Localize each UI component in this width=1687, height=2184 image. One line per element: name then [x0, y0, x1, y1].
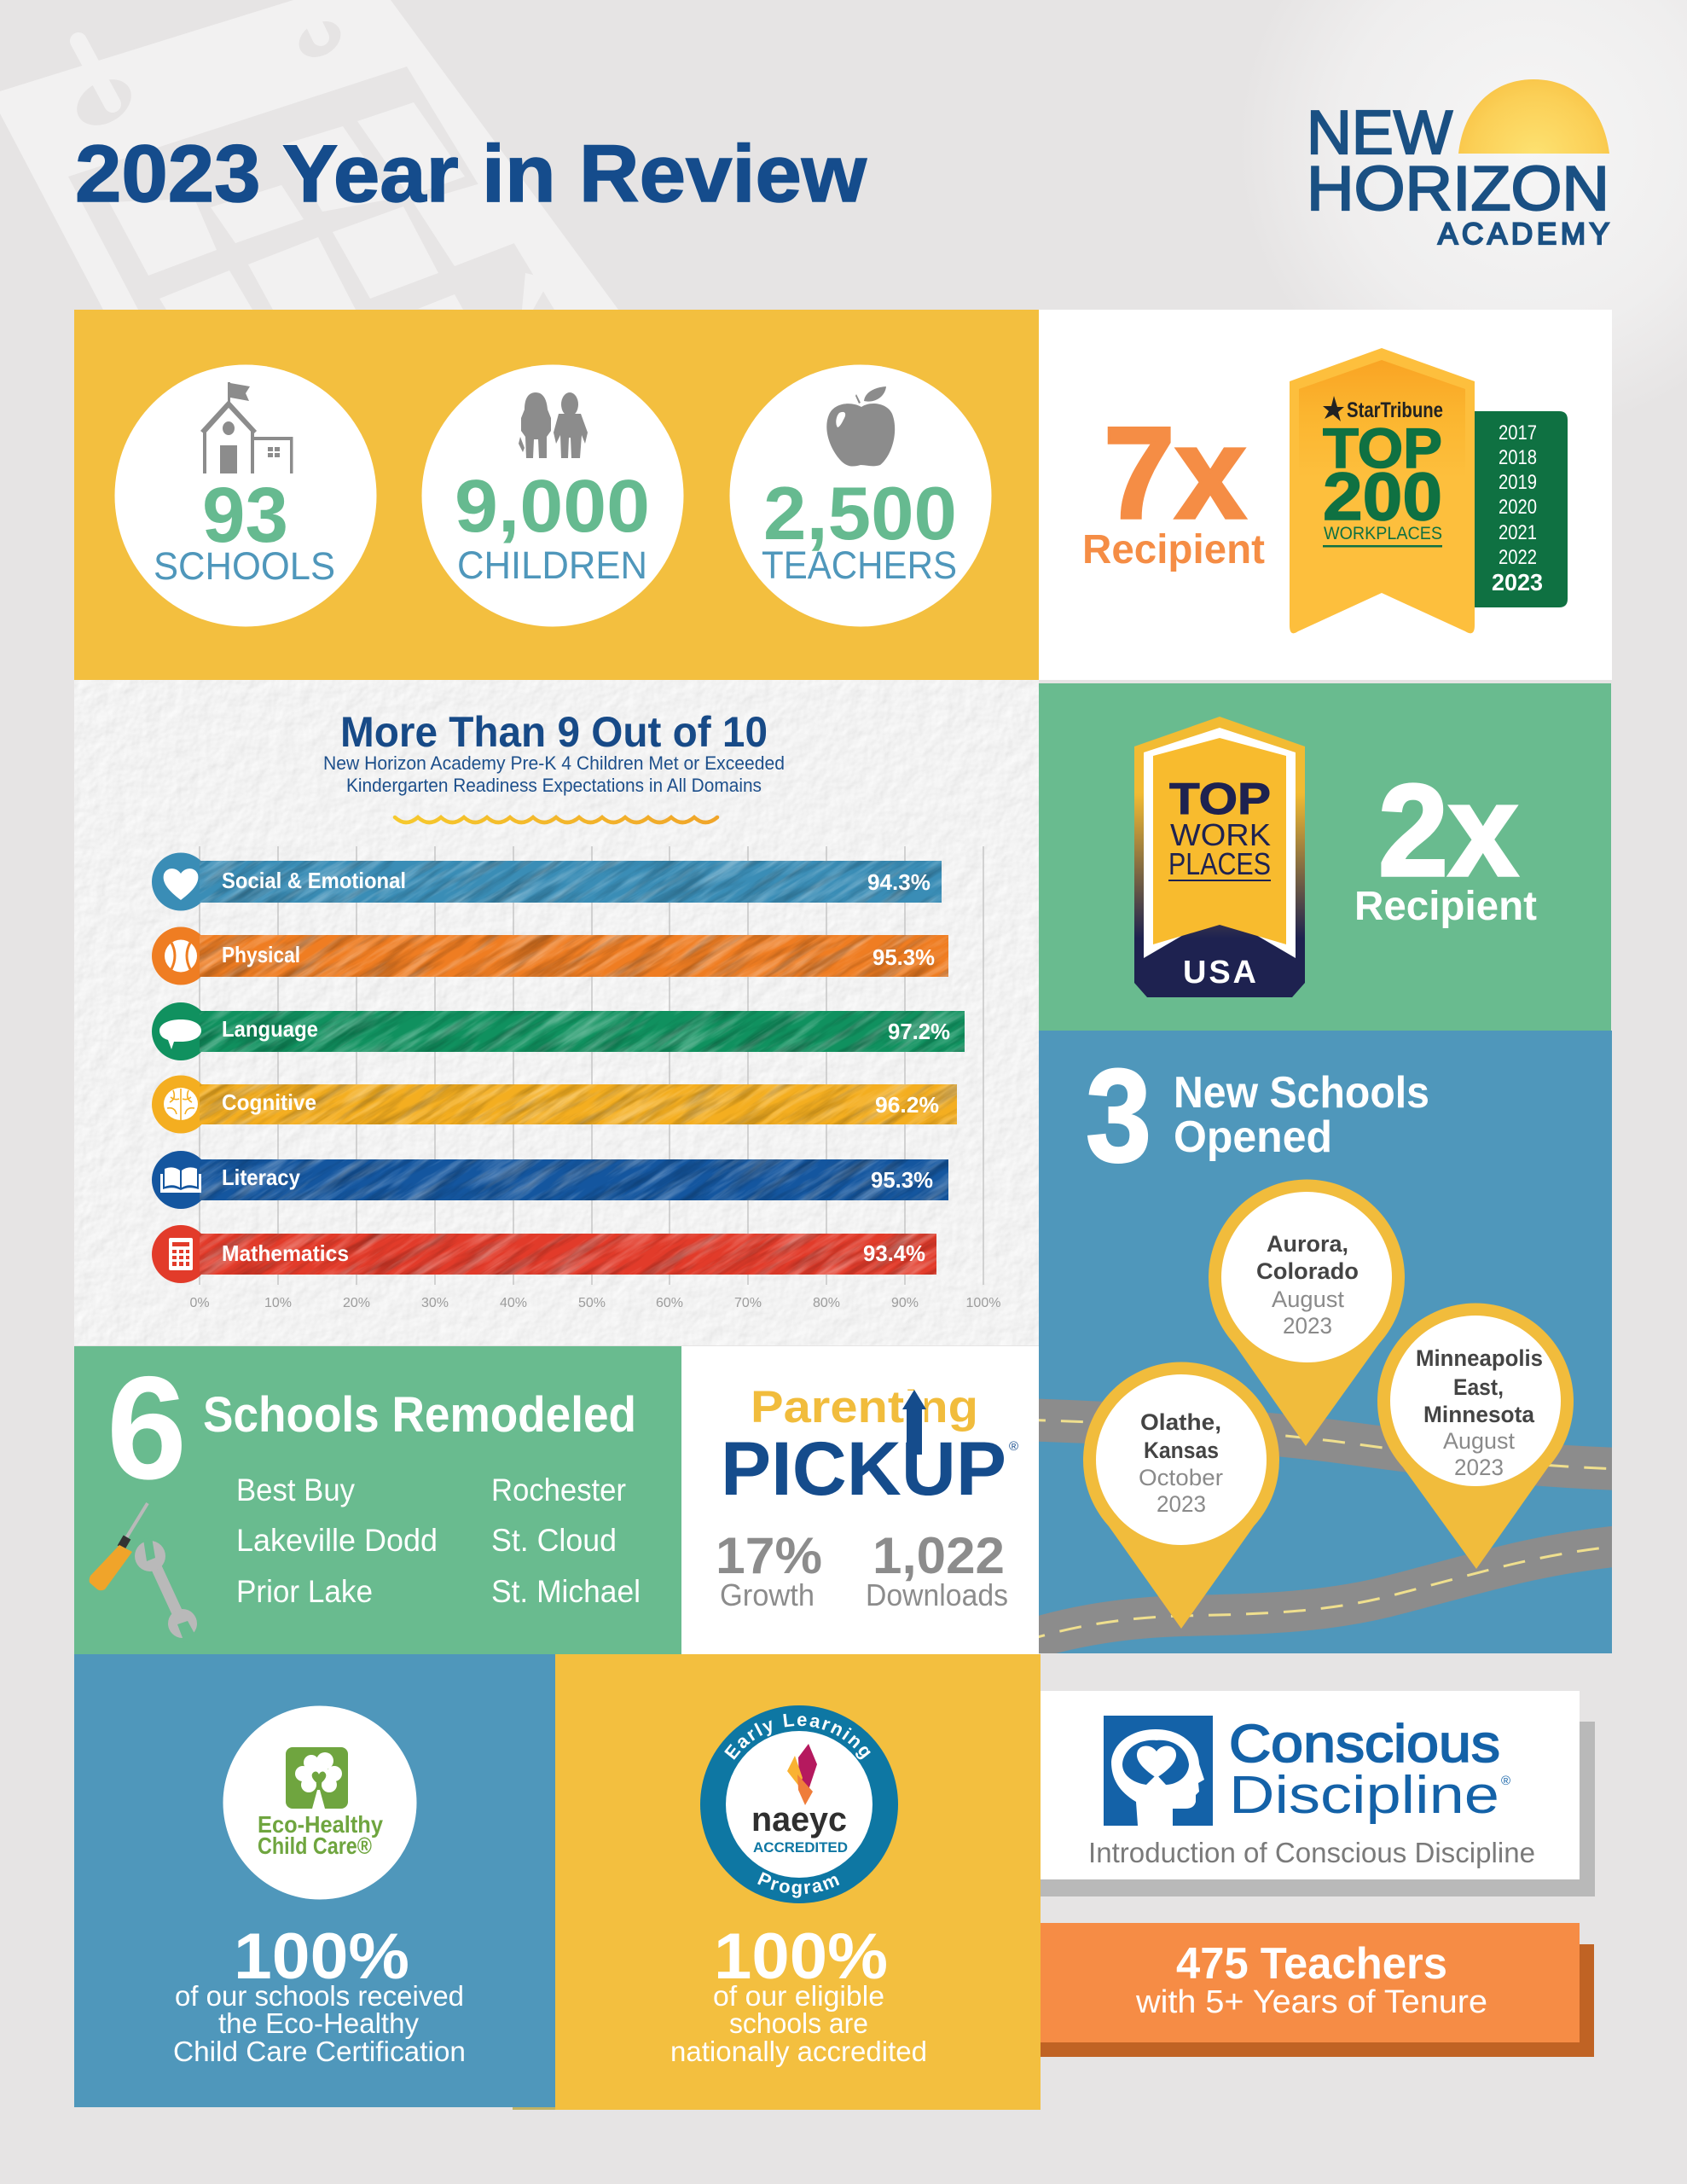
icon: calculator: [169, 1238, 193, 1270]
logo: NAEYC: Early Learning: [724, 1713, 871, 1760]
chart heading: More Than 9 Out of 10: [340, 708, 768, 756]
pin: Minneapolis East, Minnesota: Minnesota: [1423, 1402, 1535, 1427]
chart subheading: [323, 752, 785, 796]
description: nationally accredited: [670, 2036, 927, 2067]
ribbon badge: 200: [1323, 458, 1442, 534]
icon: tree: [286, 1747, 348, 1809]
panel: Star Tribune award: [1039, 310, 1612, 680]
bar: language: Language: [222, 1016, 318, 1042]
school list: [236, 1472, 641, 1609]
stat: 93 schools: [114, 365, 377, 626]
bar: mathematics: 93.4%: [863, 1240, 925, 1266]
icon: star: [1323, 396, 1344, 421]
logo wordmark: [1307, 99, 1609, 251]
bar: social and emotional: [152, 853, 942, 911]
years tab: 2021: [1499, 521, 1537, 544]
bar: cognitive: [152, 1075, 957, 1133]
school list: Lakeville Dodd: [236, 1523, 438, 1558]
bar: cognitive: 96.2%: [875, 1092, 939, 1118]
stat: downloads: 1,022: [872, 1527, 1005, 1584]
logo: New Horizon Academy: [1307, 79, 1609, 251]
heading: [1174, 1068, 1429, 1162]
chart axis labels: 100%: [966, 1296, 1000, 1310]
tenure number: 475 Teachers: [1176, 1939, 1447, 1989]
description: of our eligible: [713, 1980, 884, 2012]
chart axis labels: 50%: [578, 1296, 606, 1310]
ribbon badge: StarTribune: [1347, 398, 1443, 422]
number: 9,000: [455, 465, 650, 548]
title: 2023 Year in Review: [75, 129, 867, 219]
logo wordmark: NEW: [1307, 99, 1452, 167]
roads: [1023, 1420, 1620, 1641]
icon: apple: [826, 386, 895, 467]
school list: Prior Lake: [236, 1574, 373, 1609]
bar: language: 97.2%: [888, 1019, 950, 1044]
logo: Eco-Healthy Child Care: Child Care®: [258, 1833, 372, 1859]
ribbon badge: [1290, 348, 1475, 633]
bar: social and emotional: Social & Emotional: [222, 868, 406, 893]
chart subheading: New Horizon Academy Pre-K 4 Children Met or Exceeded: [323, 752, 785, 774]
chart axis labels: 90%: [891, 1296, 919, 1310]
panel: new schools opened: [1023, 1031, 1620, 1653]
chart axis labels: [189, 1296, 1000, 1310]
wordmark: Parenting: Parenting: [751, 1382, 978, 1432]
description: [670, 1980, 927, 2067]
recipient label: Recipient: [1354, 884, 1537, 929]
logo wordmark: Discipline: [1229, 1766, 1499, 1825]
pin: Minneapolis East, Minnesota: 2023: [1454, 1455, 1504, 1480]
pin: Olathe, Kansas: Kansas: [1144, 1438, 1219, 1463]
logo wordmark: ACADEMY: [1438, 218, 1609, 251]
logo: Eco-Healthy Child Care: [223, 1706, 416, 1899]
bar: literacy: [152, 1151, 948, 1209]
school list: Rochester: [491, 1472, 626, 1507]
icon: open book: [160, 1167, 201, 1193]
bar: physical: Physical: [222, 942, 300, 967]
icon: speech bubble: [159, 1019, 201, 1049]
registered mark: ®: [1009, 1439, 1018, 1454]
pin: Olathe, Kansas: Olathe,: [1140, 1409, 1221, 1435]
number: 2,500: [763, 471, 957, 555]
logo: NAEYC: Program: [757, 1872, 839, 1898]
icon: up arrow: [902, 1390, 926, 1455]
pin: Olathe, Kansas: [1083, 1362, 1279, 1629]
panel: kindergarten readiness chart: [74, 680, 1039, 1345]
logo: NAEYC: naeyc: [751, 1801, 847, 1838]
label: CHILDREN: [457, 543, 647, 587]
badge: PLACES: [1168, 846, 1271, 881]
stat: growth: Growth: [720, 1577, 815, 1612]
bar: mathematics: [152, 1225, 936, 1283]
pin: Aurora, Colorado: Colorado: [1256, 1258, 1359, 1284]
icon: heart: [164, 868, 198, 900]
sliver under accreditation panel: [513, 2107, 564, 2110]
chart axis labels: 20%: [343, 1296, 370, 1310]
badge: [1134, 717, 1305, 997]
pin: Aurora, Colorado: Aurora,: [1267, 1231, 1348, 1257]
icon: flame: [787, 1744, 817, 1805]
label: TEACHERS: [762, 543, 957, 587]
description: [173, 1980, 466, 2067]
big number 3: 3: [1086, 1042, 1151, 1189]
badge: TOP: [1169, 775, 1271, 824]
heading: New Schools: [1174, 1068, 1429, 1118]
pin: Olathe, Kansas: 2023: [1157, 1491, 1206, 1517]
chart axis labels: 0%: [189, 1296, 210, 1310]
heading: Opened: [1174, 1112, 1332, 1162]
years tab: 2018: [1499, 446, 1537, 469]
2x number: 2x: [1378, 758, 1518, 903]
bar: language: [152, 1002, 965, 1060]
caption: Introduction of Conscious Discipline: [1088, 1837, 1535, 1868]
logo glow: [1194, 0, 1687, 444]
chart grid: [200, 846, 983, 1285]
badge: WORK: [1170, 817, 1271, 852]
heading: Schools Remodeled: [203, 1387, 636, 1443]
school list: Best Buy: [236, 1472, 355, 1507]
panel: Eco-Healthy certification: [74, 1654, 555, 2107]
wordmark: PICKUP: PICKUP: [721, 1426, 1006, 1511]
chart axis labels: 80%: [813, 1296, 840, 1310]
chart axis labels: 70%: [734, 1296, 762, 1310]
logo wordmark: Conscious: [1229, 1715, 1500, 1774]
icon: wrench: [135, 1537, 198, 1642]
pin: Aurora, Colorado: 2023: [1283, 1313, 1332, 1339]
years tab: 2017: [1499, 421, 1537, 444]
chart subheading: Kindergarten Readiness Expectations in All Domains: [346, 775, 762, 796]
big number 6: 6: [107, 1346, 187, 1510]
icon: school: [200, 382, 293, 473]
stat: 9,000 children: [421, 365, 684, 626]
pin: Minneapolis East, Minnesota: East,: [1453, 1374, 1504, 1400]
logo: NAEYC: ACCREDITED: [753, 1839, 848, 1856]
panel: Conscious Discipline: [1041, 1691, 1595, 1896]
description: Child Care Certification: [173, 2036, 466, 2067]
pin: Aurora, Colorado: August: [1272, 1287, 1345, 1312]
description: schools are: [729, 2007, 868, 2039]
years tab: 2022: [1499, 546, 1537, 569]
number: 93: [202, 472, 288, 559]
stat: 100 percent: 100%: [234, 1920, 409, 1993]
label: SCHOOLS: [154, 544, 335, 588]
panel: key numbers: [74, 310, 1040, 680]
bar: physical: [152, 926, 948, 985]
logo: NAEYC: [700, 1705, 898, 1903]
bar: mathematics: Mathematics: [222, 1240, 349, 1266]
stat: 100 percent: 100%: [714, 1920, 888, 1993]
7x number: 7x: [1104, 400, 1246, 546]
panel: NAEYC accreditation: [555, 1654, 1041, 2110]
calendar watermark: [0, 0, 618, 310]
panel: teacher tenure: [1041, 1923, 1594, 2057]
recipient label: Recipient: [1082, 527, 1265, 572]
description: the Eco-Healthy: [218, 2007, 419, 2039]
squiggle: [395, 817, 717, 822]
pin: Minneapolis East, Minnesota: [1377, 1304, 1574, 1569]
chart axis labels: 60%: [656, 1296, 683, 1310]
logo icon: head with heart: [1104, 1716, 1213, 1826]
panel: Top Workplaces USA: [1039, 683, 1611, 1031]
logo sun: [1458, 79, 1609, 154]
stat: downloads: [866, 1527, 1008, 1612]
logo wordmark: HORIZON: [1307, 154, 1609, 224]
panel: Parenting Pickup: [681, 1346, 1039, 1654]
bar: cognitive: Cognitive: [222, 1089, 316, 1115]
bar: literacy: Literacy: [222, 1165, 300, 1190]
school list: St. Michael: [491, 1574, 641, 1609]
chart axis labels: 10%: [264, 1296, 292, 1310]
school list: St. Cloud: [491, 1523, 617, 1558]
stat: growth: 17%: [716, 1527, 822, 1584]
icon: brain: [164, 1088, 198, 1120]
years tab: 2019: [1499, 471, 1537, 494]
panel: schools remodeled: [74, 1346, 681, 1654]
icon: ball: [165, 940, 197, 973]
icon: children: [519, 392, 588, 458]
bar: physical: 95.3%: [872, 944, 935, 970]
pin: Aurora, Colorado: [1209, 1180, 1405, 1446]
stat: growth: [716, 1527, 822, 1612]
description: of our schools received: [175, 1980, 464, 2012]
pin: Minneapolis East, Minnesota: Minneapolis: [1416, 1345, 1543, 1371]
badge: USA: [1183, 955, 1256, 990]
logo wordmark: ®: [1501, 1774, 1510, 1788]
logo: Eco-Healthy Child Care: Eco-Healthy: [258, 1811, 383, 1838]
chart axis labels: 40%: [500, 1296, 527, 1310]
icon: screwdriver: [90, 1503, 148, 1590]
ribbon badge: TOP: [1323, 416, 1442, 479]
tenure caption: with 5+ Years of Tenure: [1135, 1984, 1487, 2020]
logo wordmark: [1229, 1715, 1510, 1825]
bar: social and emotional: 94.3%: [867, 869, 930, 895]
pin: Olathe, Kansas: October: [1139, 1465, 1223, 1490]
stat: downloads: Downloads: [866, 1577, 1008, 1612]
years tab: 2020: [1499, 496, 1537, 519]
bar: literacy: 95.3%: [871, 1167, 933, 1193]
years tab: 2023: [1492, 569, 1543, 595]
years tab: [1471, 411, 1568, 607]
pin: Minneapolis East, Minnesota: August: [1443, 1428, 1515, 1454]
ribbon badge: WORKPLACES: [1324, 524, 1442, 543]
chart axis labels: 30%: [421, 1296, 449, 1310]
stat: 2,500 teachers: [730, 365, 991, 626]
